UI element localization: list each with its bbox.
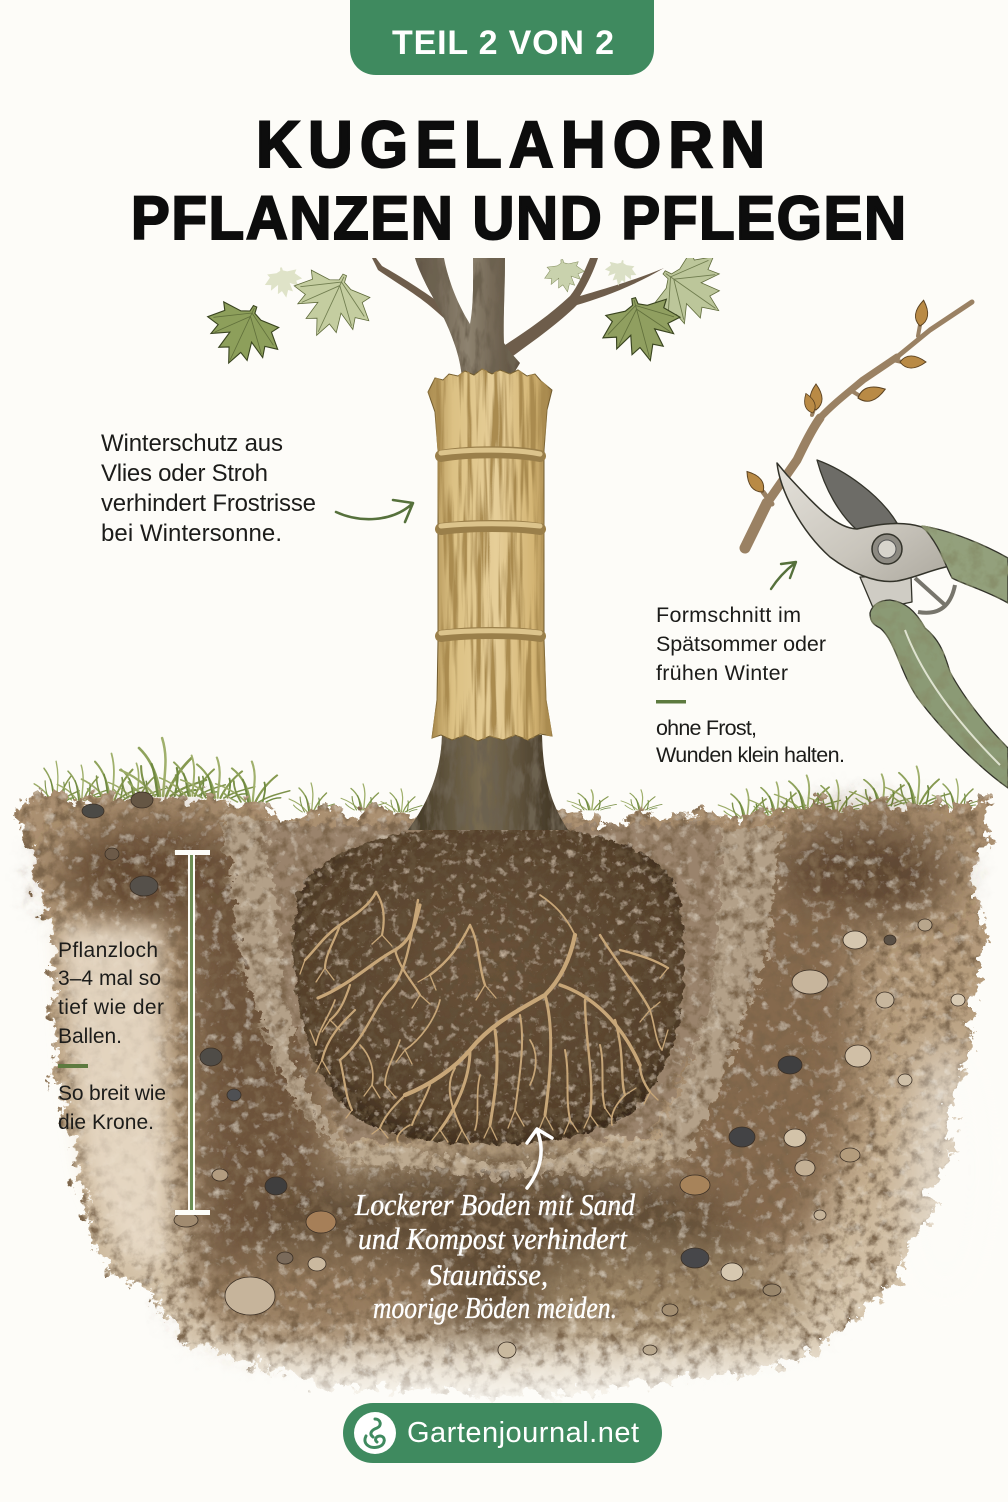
twine bands xyxy=(441,450,540,636)
winter protection straw wrap xyxy=(428,369,552,741)
lower jaw xyxy=(860,576,912,610)
callout: planting hole: tief wie der xyxy=(58,996,164,1019)
callout: winter protection: Winterschutz aus xyxy=(101,430,283,457)
callout: planting hole: Ballen. xyxy=(58,1025,122,1048)
upper dark blade xyxy=(817,460,897,530)
pruning shears xyxy=(777,460,1008,788)
root ball xyxy=(293,825,684,1144)
callout: planting hole: So breit wie xyxy=(58,1082,166,1105)
straw bundle xyxy=(428,369,552,741)
fade at lower soil edge xyxy=(0,1335,1008,1405)
buds xyxy=(742,299,930,496)
title: KUGELAHORN xyxy=(256,107,765,181)
callout: winter protection: verhindert Frostrisse xyxy=(101,490,316,517)
callout: pruning xyxy=(656,603,845,767)
callout: pruning: frühen Winter xyxy=(656,661,788,685)
pivot bolt xyxy=(872,534,902,564)
footer brand pill xyxy=(343,1403,662,1463)
title pill: TEIL 2 VON 2 xyxy=(392,24,614,62)
callout: planting hole: Pflanzloch xyxy=(58,939,158,962)
soil ball xyxy=(293,825,684,1144)
arrow: to straw wrap xyxy=(336,500,413,522)
callout: winter protection xyxy=(101,430,316,547)
callout: pruning: ohne Frost, xyxy=(656,716,757,740)
callout: soil: Lockerer Boden mit Sand xyxy=(354,1187,635,1222)
footer brand pill: Gartenjournal.net xyxy=(407,1417,639,1449)
silver blade with pivot xyxy=(777,463,950,581)
soil cross-section background xyxy=(0,738,1008,1405)
lower handle xyxy=(870,600,1008,788)
callout: soil xyxy=(354,1187,635,1325)
light wash behind planting-hole note xyxy=(58,925,168,1270)
upper trunk with branches xyxy=(372,258,664,378)
callout: pruning: Formschnitt im xyxy=(656,603,801,627)
leaves xyxy=(206,258,720,364)
pebbles xyxy=(82,792,965,1358)
trunk xyxy=(415,258,520,378)
callout: planting hole: 3–4 mal so xyxy=(58,967,161,990)
branch with buds xyxy=(742,299,972,548)
lower trunk above root ball xyxy=(408,735,568,830)
grass tufts behind the soil edge xyxy=(34,738,981,818)
title pill xyxy=(350,0,654,75)
callout: soil: moorige Böden meiden. xyxy=(373,1290,617,1325)
roots xyxy=(300,892,668,1144)
callout: pruning: Wunden klein halten. xyxy=(656,743,845,767)
callout: soil: und Kompost verhindert xyxy=(358,1221,628,1256)
light wash on right soil edge xyxy=(905,1040,985,1300)
callout: winter protection: Vlies oder Stroh xyxy=(101,460,268,487)
left and right branches xyxy=(372,258,664,356)
icon: sprout logo xyxy=(354,1412,396,1454)
callout: pruning: Spätsommer oder xyxy=(656,632,826,656)
arrow: to branch xyxy=(771,562,796,589)
depth bracket xyxy=(175,850,210,1215)
arrow: to bottom of ball xyxy=(527,1129,552,1188)
callout: winter protection: bei Wintersonne. xyxy=(101,520,282,547)
title xyxy=(131,107,906,252)
upper handle xyxy=(922,526,1008,603)
callout: planting hole: die Krone. xyxy=(58,1111,154,1134)
callout: soil: Staunässe, xyxy=(428,1257,548,1292)
title: PFLANZEN UND PFLEGEN xyxy=(131,183,906,252)
callout: planting hole xyxy=(58,939,166,1134)
spring xyxy=(915,578,955,613)
soil mass with planting hole xyxy=(14,795,995,1396)
